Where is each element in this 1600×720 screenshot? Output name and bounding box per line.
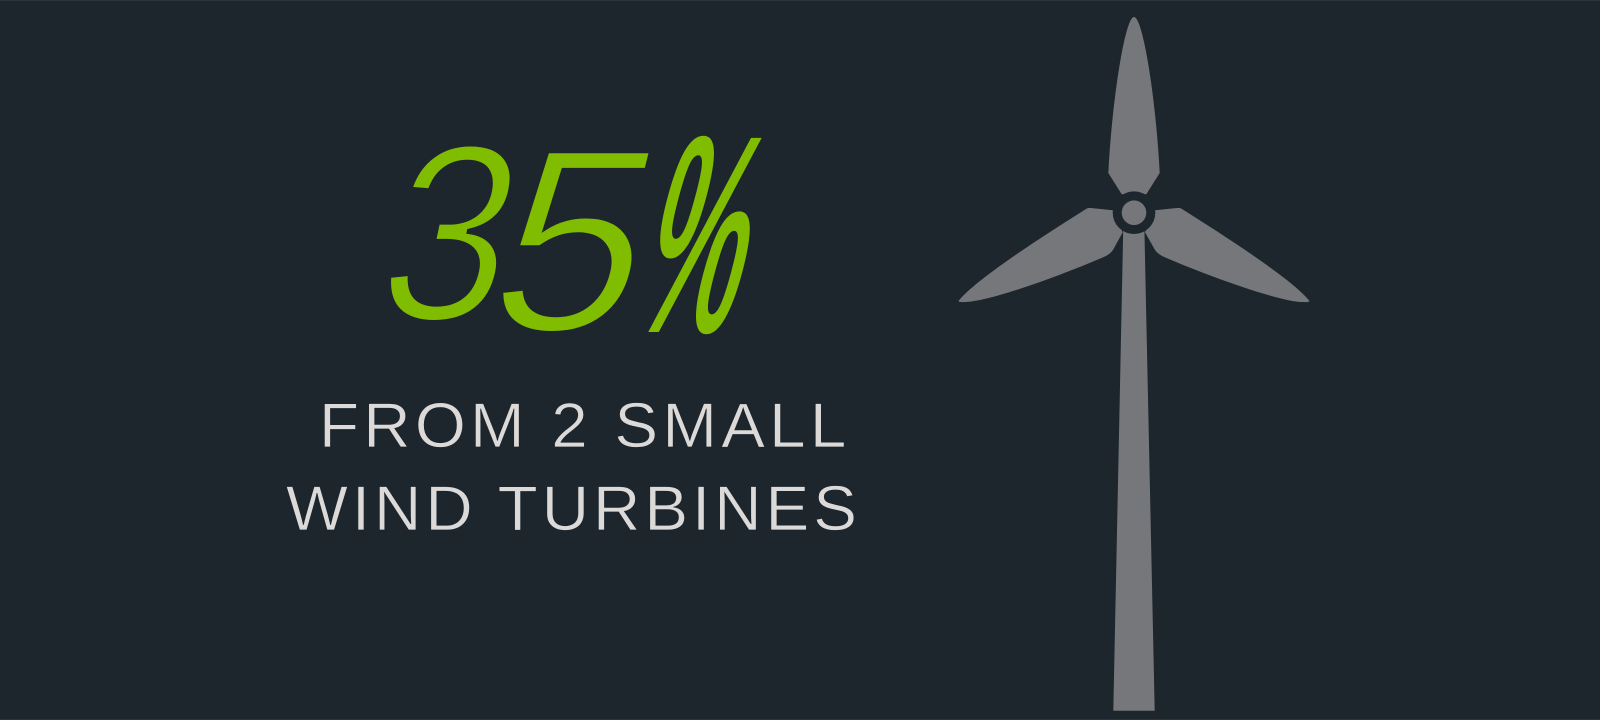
turbine tower: [1113, 225, 1155, 711]
headline stat: 35%: 3: [360, 93, 545, 374]
caption: from 2 small wind turbines: FROM 2 SMALL: [319, 390, 846, 461]
caption: from 2 small wind turbines: [286, 390, 857, 544]
hub ring: [1113, 191, 1155, 234]
hub: [1122, 200, 1146, 225]
left blade: [958, 208, 1123, 302]
caption: from 2 small wind turbines: WIND TURBINES: [286, 473, 857, 544]
headline stat: 35%: 5: [466, 94, 688, 387]
headline stat: 35%: %: [612, 77, 798, 394]
headline stat: 35%: [360, 77, 798, 394]
right blade: [1145, 208, 1310, 302]
top blade: [1108, 17, 1160, 194]
icon: wind turbine: [958, 17, 1310, 711]
